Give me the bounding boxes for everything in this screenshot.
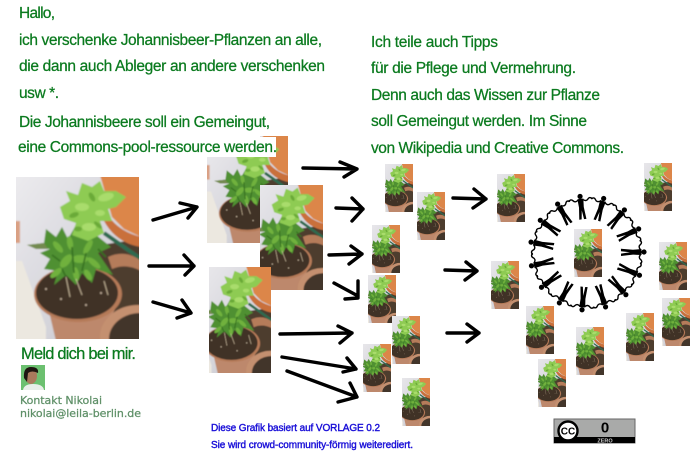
small plants: fourth generation xyxy=(483,162,700,416)
text block: greeting and invitation: Hallo, xyxy=(19,5,55,22)
contact details: nikolai@leila-berlin.de xyxy=(20,407,141,420)
text block: greeting and invitation xyxy=(18,5,325,156)
text mask behind heading line xyxy=(200,133,260,157)
text block: sharing tips: für die Pflege und Vermehrung. xyxy=(371,60,576,77)
contact details xyxy=(20,394,141,420)
text block: sharing tips: Denn auch das Wissen zur Pflanze xyxy=(371,87,600,104)
badge: CC zero licence xyxy=(554,419,635,444)
image: second generation plant lower xyxy=(209,267,271,373)
contact call to action: Meld dich bei mir. xyxy=(21,345,136,363)
text block: sharing tips xyxy=(371,34,624,157)
text block: sharing tips: soll Gemeingut werden. Im Sinne xyxy=(371,113,587,130)
image: plant in the ring centre xyxy=(574,229,602,277)
badge: CC zero licence: ZERO xyxy=(597,438,613,444)
text block: greeting and invitation: usw *. xyxy=(19,85,59,102)
image: second generation plant middle xyxy=(260,185,323,290)
community ring of people around a plant xyxy=(526,192,647,313)
small plants: third generation xyxy=(355,163,456,435)
footer note: Sie wird crowd-community-förmig weiterediert. xyxy=(211,440,413,451)
icon: circle of people holding hands xyxy=(526,192,647,313)
text mask behind word werden xyxy=(260,137,276,157)
text block: sharing tips: von Wikipedia und Creative Commons. xyxy=(371,140,624,157)
text block: greeting and invitation: eine Commons-pool-ressource werden. xyxy=(18,139,277,156)
text block: sharing tips: Ich teile auch Tipps xyxy=(371,34,498,51)
badge: CC zero licence: 0 xyxy=(601,420,609,436)
image: second generation plant top xyxy=(207,136,288,243)
arrows: second to third generation xyxy=(280,162,363,402)
text block: greeting and invitation: die dann auch Ableger an andere verschenken xyxy=(19,58,325,75)
image: large currant plant in pot xyxy=(16,177,139,339)
contact details: Kontakt Nikolai xyxy=(20,394,102,407)
text block: greeting and invitation: ich verschenke Johannisbeer-Pflanzen an alle, xyxy=(19,32,322,49)
text block: greeting and invitation: Die Johannisbeere soll ein Gemeingut, xyxy=(19,114,270,131)
footer note xyxy=(211,423,413,451)
footer note: Diese Grafik basiert auf VORLAGE 0.2 xyxy=(211,423,380,434)
icon: contact portrait xyxy=(21,365,45,390)
badge: CC zero licence: CC xyxy=(561,426,575,438)
arrows: first to second generation xyxy=(149,203,197,318)
arrows: third to fourth generation xyxy=(445,189,486,342)
